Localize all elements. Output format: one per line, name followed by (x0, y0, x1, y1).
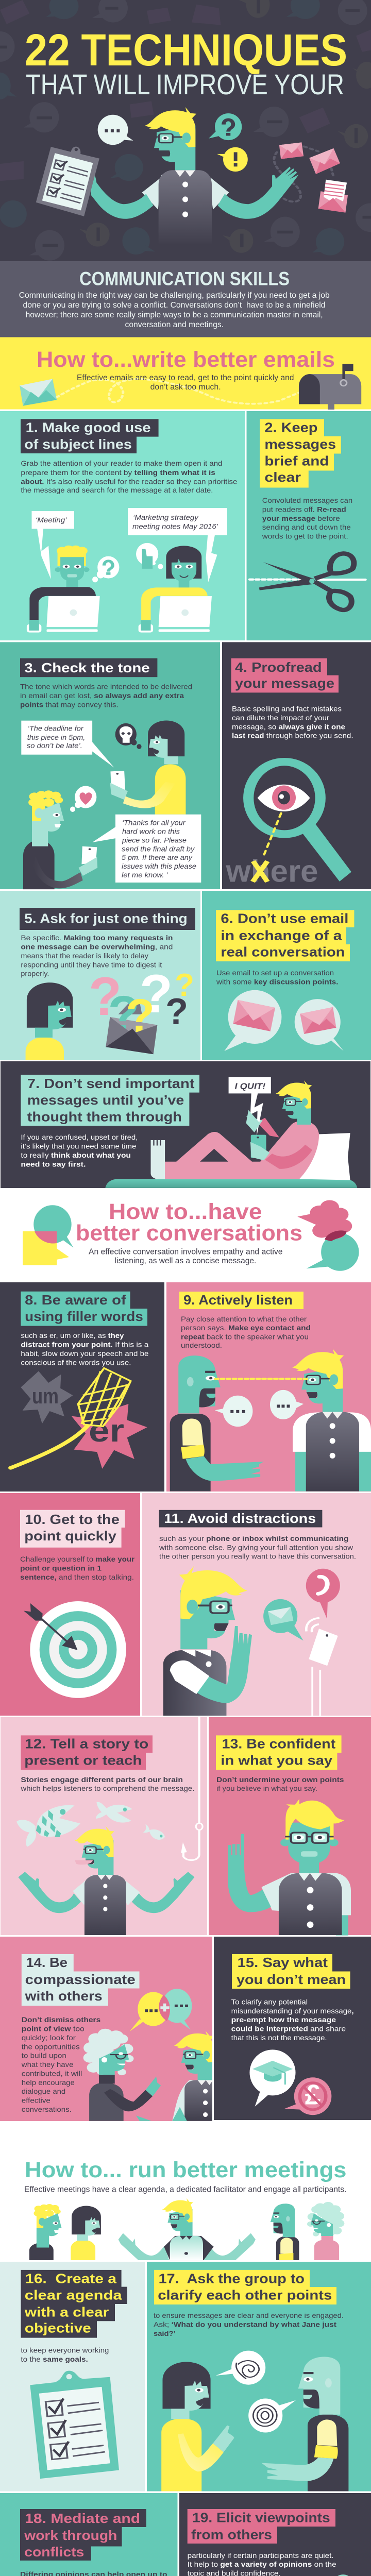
body text (21, 2015, 100, 2113)
body text: which helps listeners to comprehend the message. (20, 1784, 194, 1792)
icon: no money bubble (284, 2077, 331, 2115)
icon: thought bubble thumbs up (136, 543, 163, 569)
panel: tip 14 be compassionate (0, 1937, 214, 2121)
body text: points that may convey this. (20, 700, 119, 708)
heading: messages (264, 436, 336, 452)
body text: To clarify any potential (231, 1997, 308, 2006)
heading (231, 658, 339, 692)
dotted line of sight (215, 1376, 309, 1382)
storyteller (18, 1826, 194, 1935)
heading: 9. Actively listen (183, 1292, 293, 1308)
panel: tip 18 mediate conflicts (0, 2493, 177, 2576)
vest (159, 170, 212, 245)
subtitle: An effective conversation involves empathy and active (89, 1247, 282, 1256)
body text: one message can be overwhelming , and (21, 943, 173, 951)
body text: words to get to the point. (262, 532, 348, 540)
body text: the opportunities (22, 2042, 80, 2050)
body text: the message and search for the message at a later date. (21, 486, 213, 494)
body text (20, 1775, 194, 1792)
woman (139, 546, 212, 633)
body text: misunderstanding of your message , (231, 2007, 354, 2015)
heading: clarify each other points (158, 2287, 332, 2303)
illustration: fish, hook and storyteller (16, 1717, 203, 1935)
body text: If you are confused, upset or tired, (21, 1133, 138, 1141)
body text: sending and cut down the (262, 523, 351, 531)
icon: ringing phone (306, 1618, 338, 1716)
woman (161, 2362, 234, 2492)
body text: about. It’s also really useful for the reader so they can prioritise (21, 477, 238, 485)
callout: deadline polite: piece so far. Please (122, 836, 187, 844)
body text: the other person you really want to have this conversation. (159, 1552, 356, 1561)
callout tails (37, 529, 51, 579)
panel: how to write better emails (0, 337, 371, 410)
body text (181, 1315, 311, 1349)
heading (20, 908, 195, 930)
illustration: envelope with question marks: ? (165, 991, 188, 1032)
right arm and hand (217, 166, 299, 219)
panel: tip 9 actively listen (166, 1282, 371, 1492)
heading: using filler words (25, 1309, 143, 1324)
heading (232, 1954, 350, 1989)
intro text (19, 291, 330, 329)
starburst er: er (89, 1413, 124, 1449)
heading: 3. Check the tone (24, 660, 150, 675)
body text: put readers off. Re-read (262, 505, 346, 513)
body text: point of view too (22, 2025, 85, 2033)
illustration: magnifier and eye (248, 762, 351, 882)
starburst er (72, 1404, 147, 1469)
body text: Don’t undermine your own points (216, 1775, 344, 1784)
callout: deadline harsh: so don’t be late’. (27, 741, 82, 750)
heading: thought them through (27, 1109, 182, 1125)
heading: 16. Create a (25, 2270, 117, 2286)
callout: I quit (229, 1077, 271, 1136)
body text (21, 2346, 109, 2363)
heading: clear agenda (25, 2287, 122, 2303)
bob haired woman (71, 2206, 101, 2260)
dots bubble (332, 2574, 354, 2576)
icon: bubbles with envelopes (224, 990, 344, 1051)
body text: with some key discussion points. (216, 977, 338, 986)
woman with phone (110, 720, 185, 815)
body text: Basic spelling and fact mistakes (232, 704, 342, 713)
heading: 7. Don’t send important (27, 1076, 195, 1091)
body text: to the same goals. (21, 2355, 88, 2363)
heading (154, 2270, 336, 2304)
legs and torso (164, 1121, 319, 1179)
heading: 19. Elicit viewpoints (192, 2510, 330, 2525)
subtitle: Effective meetings have a clear agenda, a dedicated facilitator and engage all participants. (24, 2185, 346, 2194)
heading (21, 1075, 199, 1126)
panel: tip 15 say what you do not mean (214, 1937, 371, 2120)
callout: marketing strategy: ‘Marketing strategy (133, 513, 199, 521)
icon: teal envelope (20, 379, 57, 406)
body text (188, 2551, 336, 2576)
scribble bubble (216, 2351, 265, 2385)
illustration: woman (26, 982, 73, 1060)
body text (216, 969, 338, 986)
heading: 10. Get to the (25, 1512, 120, 1527)
heading: communication skills: COMMUNICATION SKILLS (79, 268, 290, 290)
panel: tip 17 clarify points (147, 2262, 371, 2492)
shirt sleeves (142, 170, 229, 210)
fishing hook (183, 1717, 199, 1860)
body text: message, so always give it one (232, 722, 345, 731)
body text: what they have (21, 2060, 74, 2069)
body text: quickly; look for (22, 2033, 76, 2042)
heading: How to...have (109, 1199, 262, 1224)
heading: you don’t mean (237, 1972, 346, 1987)
icons: left overlapping bubbles (23, 1205, 73, 1265)
heading (21, 2270, 127, 2338)
panel: tip 7 think first (1, 1061, 370, 1188)
panel: tip 11 avoid distractions (142, 1493, 371, 1716)
icon: target with arrow (24, 1601, 126, 1698)
icon: mailbox (299, 364, 361, 410)
heading: 14. Be (26, 1955, 68, 1970)
heading: 11. Avoid distractions (164, 1511, 316, 1526)
icon: exclamation bubble (217, 147, 248, 172)
body text: properly. (21, 970, 49, 978)
body text: Use email to set up a conversation (216, 969, 334, 977)
callout: deadline polite: send the final draft by (122, 844, 195, 853)
subtitle (77, 374, 294, 392)
body text: Convoluted messages can (262, 496, 352, 504)
illustration: two people at laptops (27, 529, 217, 633)
heading (21, 1292, 147, 1326)
body text: pre-empt how the message (231, 2015, 336, 2024)
body text: to keep everyone working (21, 2346, 109, 2354)
heading: 18. Mediate and (25, 2511, 140, 2526)
heading: compassionate (25, 1972, 136, 1987)
callout: deadline polite: 5 pm. If there are any (122, 853, 193, 861)
subtitle: Effective emails are easy to read, get to the point quickly and (77, 374, 294, 382)
callout: deadline harsh: ‘The deadline for (28, 724, 84, 733)
body text (21, 934, 173, 978)
body text: effective (22, 2096, 50, 2105)
callout: deadline polite: hard work on this (122, 827, 180, 835)
heading (22, 1954, 139, 2006)
body text: conversations. (22, 2105, 72, 2113)
body text: prepare them for the content by telling them what it is (21, 468, 215, 477)
body text: means that the reader is likely to delay (21, 952, 148, 960)
section: run better meetings (24, 2158, 346, 2260)
panel: header (0, 0, 371, 261)
icon: clipboard (30, 2371, 119, 2479)
dotted envelope trail (274, 146, 333, 201)
heading (76, 1199, 302, 1246)
body text: The tone which words are intended to be delivered (20, 682, 192, 690)
callout: marketing strategy: meeting notes May 2016’ (132, 522, 218, 531)
heading: 8. Be aware of (25, 1292, 126, 1308)
illustration: envelope with question marks: ? (108, 986, 140, 1043)
heading (188, 2509, 335, 2544)
illustration: overlapping bubbles and two people (83, 1989, 214, 2121)
heading: How to... run better meetings (25, 2158, 346, 2182)
body text: need to say first. (21, 1160, 86, 1168)
heading: better conversations (76, 1221, 302, 1246)
icon: heart thought (70, 786, 96, 812)
illustration: envelope with question marks: ? (140, 964, 173, 1024)
body text: such as er, um or like, as they (21, 1331, 124, 1340)
panel: tip 16 clear agenda (0, 2262, 145, 2492)
glasses man (292, 1349, 371, 1492)
curly haired man (29, 2204, 62, 2260)
heading (20, 1510, 125, 1548)
intro text: conversation and meetings. (125, 320, 224, 329)
intro text: done or you are trying to solve a conflict. Conversations don’t have to be a minefield (23, 301, 326, 310)
callout tail (91, 741, 114, 768)
heading: work through (24, 2528, 117, 2543)
body text: dialogue and (22, 2087, 65, 2095)
heading: from others (191, 2527, 272, 2542)
foot (151, 1140, 165, 1179)
heading: real conversation (221, 944, 345, 959)
misspelled word: where (225, 854, 318, 888)
heading: your message (235, 675, 334, 691)
icon: speech bubble dots (98, 115, 133, 145)
icon: no money bubble: £ (305, 2078, 321, 2110)
bearded man (271, 2204, 299, 2260)
background pattern of faint speech bubbles and envelopes (0, 0, 371, 261)
bed and pillow (105, 1179, 357, 1188)
title: 22 techniques: 22 TECHNIQUES (25, 25, 347, 75)
left arm (91, 174, 154, 219)
man (27, 546, 100, 633)
callout: deadline polite (115, 815, 201, 883)
subtitle: don’t ask too much. (150, 383, 221, 392)
callout: deadline harsh: this piece in 5pm, (27, 733, 85, 741)
body text: person says. Make eye contact and (181, 1324, 311, 1332)
body text: it’s likely that you need some time (21, 1142, 137, 1150)
heading (20, 658, 157, 677)
heading: with a clear (24, 2304, 109, 2319)
body text: help encourage (22, 2078, 75, 2087)
body text: to really think about what you (21, 1151, 131, 1159)
body text (262, 496, 352, 540)
icon: skull thought (115, 723, 142, 749)
heading: present or teach (24, 1752, 142, 1768)
body text (159, 1534, 356, 1561)
heading: point quickly (24, 1528, 116, 1544)
body text: distract from your point. If this is a (21, 1341, 149, 1349)
heading: 2. Keep (264, 420, 317, 435)
callout: meeting (32, 511, 74, 529)
body text (216, 1775, 344, 1792)
spiral bubble (248, 2398, 296, 2433)
panel: tip 3 check the tone (0, 642, 220, 889)
panel: tip 19 elicit viewpoints (177, 2493, 371, 2576)
icon: mail bubble (263, 1599, 303, 1641)
body text: conscious of the words you use. (21, 1358, 131, 1366)
subtitle: listening, as well as a concise message. (115, 1257, 256, 1265)
icon: thought bubble question (92, 556, 119, 582)
dotted mail trail and icons (20, 364, 361, 410)
heading: conflicts (24, 2544, 84, 2560)
heading: 1. Make good use (26, 420, 151, 435)
central man (119, 2198, 256, 2260)
heading: with others (25, 1988, 103, 2004)
heading (21, 1735, 153, 1770)
panel: tip 12 tell a story (1, 1717, 207, 1935)
callout: marketing strategy (128, 508, 227, 535)
callout: deadline polite: ‘Thanks for all your (122, 819, 186, 827)
body text: to build upon (22, 2052, 66, 2060)
callout: meeting: ‘Meeting’ (36, 516, 67, 524)
body text (232, 704, 353, 740)
icon: scissors (249, 553, 367, 610)
body text: such as your phone or inbox whilst communicating (159, 1534, 348, 1543)
illustration: envelope with question marks: ? (175, 968, 194, 1003)
body text: habit, slow down your speech and be (21, 1349, 149, 1358)
body text: Be specific. Making too many requests in (21, 934, 173, 942)
illustration: envelope with question marks: ? (89, 967, 122, 1027)
body text (21, 1133, 138, 1168)
heading (21, 419, 159, 453)
body text (20, 1555, 135, 1581)
illustration: five meeting participants (29, 2198, 344, 2260)
body text: Challenge yourself to make your (20, 1555, 135, 1563)
glasses man (136, 2031, 214, 2121)
panel: tip 4 proofread (222, 642, 371, 889)
body text: Grab the attention of your reader to make them open it and (21, 459, 222, 467)
icon: phone bubble (306, 1569, 340, 1619)
body text (154, 2311, 344, 2337)
body text: with someone else. By giving your full attention you show (159, 1543, 353, 1551)
body text: your message before (262, 514, 340, 522)
body text: point or question in 1 (20, 1564, 102, 1572)
body text: Stories engage different parts of our brain (21, 1775, 183, 1784)
body text: Ask; ‘What do you understand by what Jane just (154, 2320, 336, 2328)
body text: can dilute the impact of your (232, 714, 329, 722)
overlapping bubbles (130, 1989, 192, 2031)
fish (16, 1802, 165, 1847)
callout: deadline polite: issues with this please (122, 862, 196, 870)
heading (216, 910, 354, 961)
panel: tip 6 do not use email (202, 891, 371, 1060)
body text: could be interpreted and share (231, 2025, 346, 2033)
body text: said?’ (154, 2329, 176, 2337)
heading: 6. Don’t use email (221, 910, 348, 926)
panel: tip 13 be confident (209, 1717, 371, 1936)
starburst um: um (32, 1384, 59, 1408)
fly swatter (11, 1368, 130, 1468)
older woman (83, 2029, 161, 2121)
heading: 12. Tell a story to (25, 1736, 148, 1751)
heading: 15. Say what (238, 1955, 328, 1970)
panel: tip 1 subject lines (0, 411, 245, 640)
head (145, 107, 196, 170)
body text (20, 682, 192, 708)
body text: in email can get lost, so always add any extra (20, 691, 184, 700)
callout: I quit: I QUIT! (235, 1082, 266, 1091)
body text (21, 1331, 149, 1366)
bearded man (170, 1355, 264, 1492)
heading (260, 419, 341, 487)
icons: right overlapping bubbles (297, 1200, 359, 1271)
heading: brief and (264, 453, 329, 469)
body text: sentence, and then stop talking. (20, 1573, 134, 1581)
bearded man (261, 2357, 348, 2492)
panel: tip 2 keep messages brief (246, 411, 371, 640)
body text: Don’t dismiss others (22, 2015, 100, 2024)
heading: messages until you’ve (27, 1092, 184, 1108)
divider between tip 14 and 15 (212, 1937, 214, 2121)
illustration: envelope with question marks: ? (126, 990, 155, 1042)
heading: objective (25, 2320, 91, 2336)
illustration: woman and bearded man talking (161, 2351, 348, 2492)
clipboard (36, 147, 99, 216)
older woman (307, 2202, 344, 2260)
body text (21, 459, 238, 494)
speech bubbles (215, 1390, 303, 1427)
icon: pink envelopes (279, 142, 348, 213)
heading: of subject lines (24, 436, 132, 452)
body text: repeat back to the speaker what you (181, 1333, 309, 1341)
panel: introduction band (0, 261, 371, 337)
heading (20, 2509, 146, 2561)
icon: question bubble (209, 113, 242, 140)
callout: deadline polite: let me know. ’ (122, 871, 168, 879)
body text: if you believe in what you say. (216, 1784, 317, 1792)
illustration: man with clipboard and envelopes (36, 107, 348, 245)
starburst um (21, 1371, 73, 1423)
intro text: however; there are some really simple ways to be a communication master in email, (26, 311, 323, 319)
man with phone (23, 790, 97, 889)
illustration: man ignoring phone (163, 1566, 340, 1716)
section: better conversations (23, 1199, 359, 1271)
heading: How to...write better emails (37, 347, 335, 372)
panel: tip 8 filler words (0, 1282, 164, 1492)
body text: understood. (181, 1341, 222, 1349)
panel: tip 5 ask for one thing (0, 891, 200, 1060)
arm and phone (251, 1135, 266, 1158)
heading: 13. Be confident (222, 1736, 335, 1751)
illustration: two people with phones (23, 720, 185, 889)
body text: particularly if certain participants are quiet. (188, 2551, 334, 2560)
man head (276, 1080, 312, 1125)
body text: contributed, it will (22, 2069, 82, 2077)
body text: to ensure messages are clear and everyone is engaged. (154, 2311, 344, 2319)
illustration: man lying on bed with phone (105, 1116, 357, 1188)
body text (231, 1997, 354, 2042)
illustration: bearded man and glasses man (170, 1349, 371, 1492)
illustration: two people exchanging opinions (338, 2574, 348, 2576)
heading: in exchange of a (221, 927, 342, 943)
panel: tip 10 get to the point (0, 1493, 140, 1716)
heading: 5. Ask for just one thing (24, 910, 188, 926)
heading: 17. Ask the group to (159, 2270, 305, 2286)
illustration: confident man (228, 1799, 351, 1936)
heading: clear (264, 469, 301, 485)
body text: responding until they have time to digest it (21, 960, 162, 969)
body text: last read through before you send. (232, 732, 353, 740)
body text: Pay close attention to what the other (181, 1315, 307, 1323)
intro text: Communicating in the right way can be challenging, particularly if you need to get a job (19, 291, 330, 300)
body text: that this is not the message. (231, 2033, 327, 2042)
subtitle (89, 1247, 282, 1265)
heading: in what you say (221, 1752, 333, 1768)
heading (216, 1735, 342, 1770)
heading: 4. Proofread (235, 659, 322, 675)
illustration: envelope with question marks (89, 964, 194, 1054)
callout: deadline harsh (21, 721, 92, 755)
body text: It help to get a variety of opinions on the (188, 2560, 336, 2568)
icon: graduation cap bubble (249, 2049, 296, 2107)
